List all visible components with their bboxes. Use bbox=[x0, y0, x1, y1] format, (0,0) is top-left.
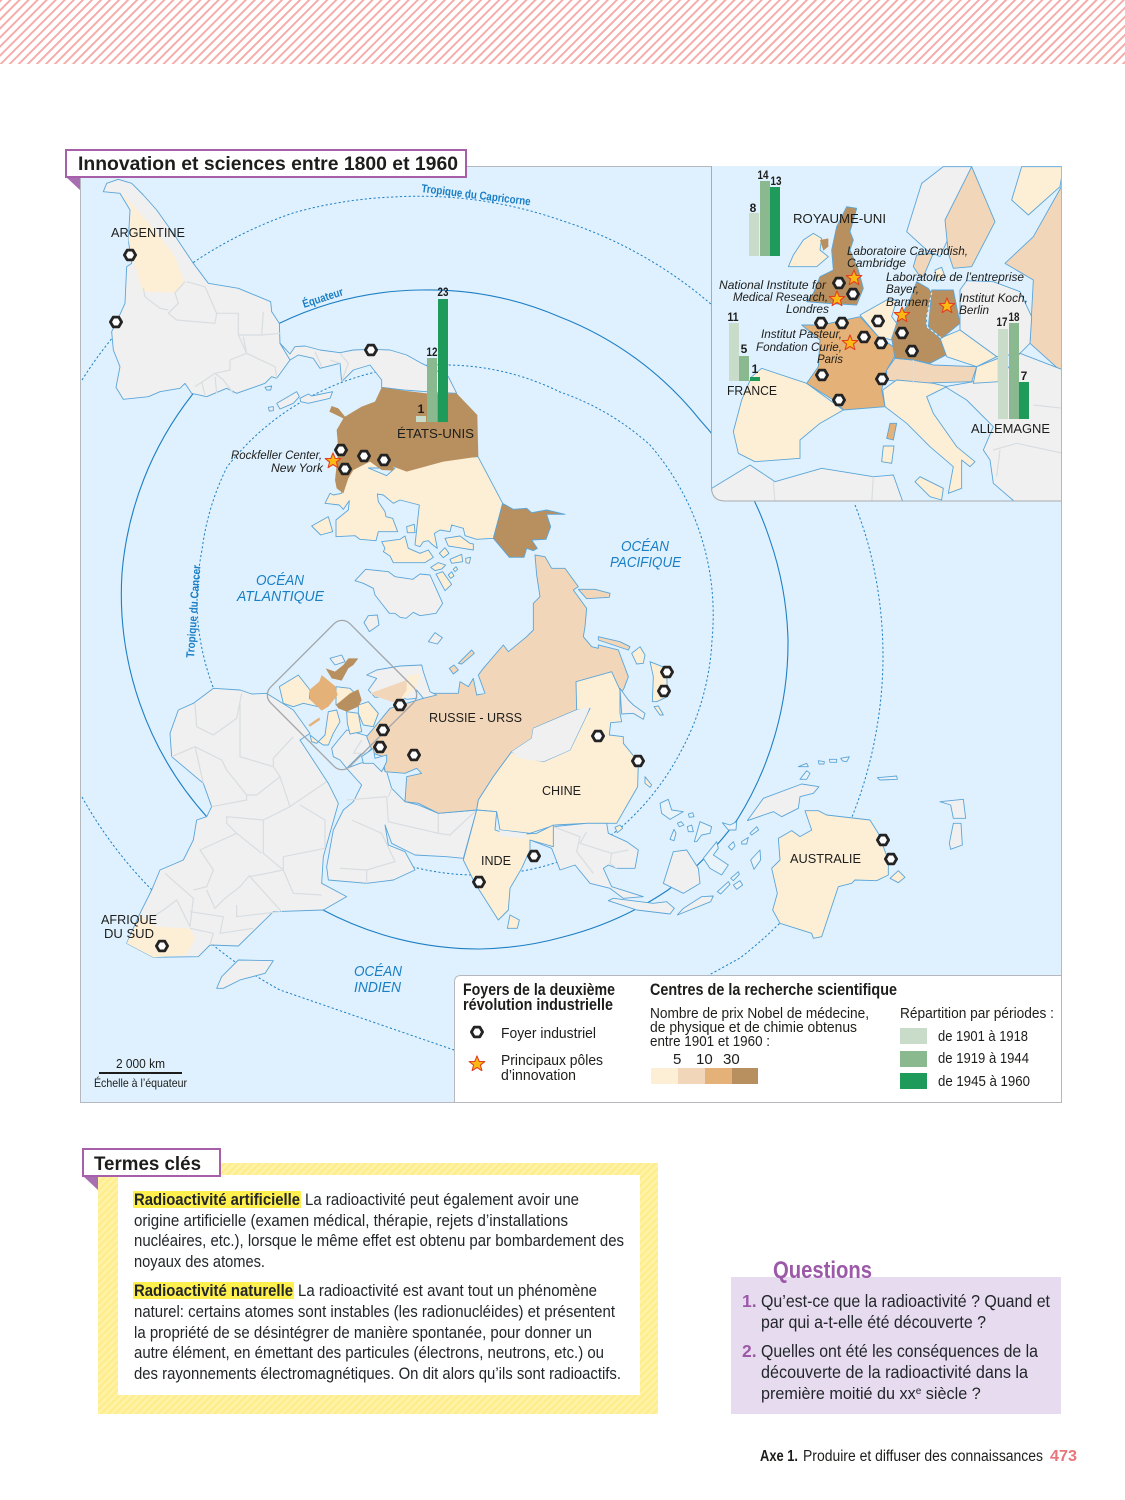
innovation pole labels: National Institute for bbox=[719, 278, 827, 292]
bar chart: Royaume-Uni: 14 bbox=[758, 168, 769, 182]
question 1: Qu’est-ce que la radioactivité ? Quand et bbox=[761, 1291, 1050, 1311]
legend: Nobel prizes scale bbox=[650, 981, 897, 1084]
country labels: RUSSIE - URSS bbox=[429, 710, 522, 725]
land: India bbox=[463, 810, 553, 920]
panel: questions: Questions bbox=[773, 1257, 872, 1284]
innovation pole labels: Laboratoire de l’entreprise bbox=[886, 270, 1024, 284]
key term: natural radioactivity: autre élément, en émettant des particules (électrons, neutrons, etc.) ou bbox=[134, 1344, 604, 1362]
bar chart: Allemagne bbox=[996, 310, 1029, 419]
question 1: par qui a-t-elle été découverte ? bbox=[761, 1312, 986, 1332]
question 2 bbox=[742, 1341, 1038, 1403]
line labels: equator and tropics: Tropique du Cancer bbox=[185, 564, 204, 658]
legend: Nobel prizes scale: 10 bbox=[696, 1051, 713, 1068]
industrial centres: inset bbox=[815, 278, 918, 405]
country labels: ALLEMAGNE bbox=[971, 421, 1050, 436]
innovation pole labels: Fondation Curie, bbox=[756, 340, 842, 354]
country labels: AFRIQUE bbox=[101, 912, 157, 927]
question 2: 2. bbox=[742, 1341, 757, 1361]
locator frame: Europe bbox=[263, 616, 421, 774]
bar chart: États-Unis: 12 bbox=[426, 345, 438, 359]
country labels: INDE bbox=[481, 853, 511, 868]
question 1 bbox=[742, 1291, 1050, 1332]
panel: questions bbox=[731, 1257, 1061, 1414]
legend: periods: de 1901 à 1918 bbox=[938, 1028, 1028, 1045]
land: Russia, China, Asia, Oceania bbox=[362, 555, 966, 938]
legend: periods: Répartition par périodes : bbox=[900, 1005, 1054, 1022]
key term: artificial radioactivity: origine artificielle (examen médical, thérapie, rejets d’installations bbox=[134, 1212, 568, 1230]
country labels: ROYAUME-UNI bbox=[793, 211, 886, 226]
line labels: equator and tropics: Tropique du Capricorne bbox=[421, 183, 531, 208]
bar chart: France bbox=[728, 310, 760, 381]
innovation pole labels: Institut Koch, bbox=[959, 291, 1028, 305]
legend: industrial foci: révolution industrielle bbox=[463, 996, 613, 1014]
question 2: e bbox=[916, 1386, 922, 1397]
country labels: ARGENTINE bbox=[111, 225, 185, 240]
land: Canada, Alaska, Greenland bbox=[312, 457, 565, 632]
map title: Innovation et sciences entre 1800 et 1960 bbox=[78, 153, 458, 175]
locator: Europe in main map bbox=[279, 655, 437, 745]
footer: page reference: Produire et diffuser des connaissances bbox=[803, 1448, 1043, 1465]
innovation pole labels: Medical Research, bbox=[733, 290, 828, 304]
innovation pole labels: Bayer, bbox=[886, 282, 919, 296]
question 2: première moitié du xx bbox=[761, 1385, 916, 1403]
ocean labels: ATLANTIQUE bbox=[236, 589, 324, 605]
key term: natural radioactivity: Radioactivité naturelle bbox=[134, 1282, 293, 1300]
scale bar: 2 000 km bbox=[116, 1056, 165, 1071]
innovation pole labels: Barmen bbox=[886, 295, 928, 309]
ocean labels: OCÉAN bbox=[621, 538, 669, 555]
legend bbox=[454, 976, 1062, 1102]
innovation pole labels bbox=[231, 244, 1028, 475]
legend: Nobel prizes scale: Centres de la recherche scientifique bbox=[650, 981, 897, 999]
country labels: CHINE bbox=[542, 783, 581, 798]
ocean labels: INDIEN bbox=[354, 980, 401, 996]
country labels: AUSTRALIE bbox=[790, 851, 861, 866]
legend: industrial foci: Foyer industriel bbox=[501, 1025, 596, 1042]
question 1: 1. bbox=[742, 1291, 757, 1311]
scale bar: Échelle à l’équateur bbox=[94, 1075, 187, 1090]
map title bbox=[66, 150, 466, 190]
key term: artificial radioactivity: nucléaires, etc.), lorsque le même effet est obtenu par bombardement des bbox=[134, 1232, 624, 1250]
legend: Nobel prizes scale: 5 bbox=[673, 1051, 681, 1068]
panel: key terms bbox=[83, 1149, 658, 1414]
country labels bbox=[101, 211, 1050, 941]
bar chart: Royaume-Uni: 8 bbox=[750, 201, 757, 215]
country labels: ÉTATS-UNIS bbox=[397, 426, 474, 441]
key term: natural radioactivity: naturel: certains atomes sont instables (les radionucléides) et présentent bbox=[134, 1303, 615, 1321]
legend: periods: de 1919 à 1944 bbox=[938, 1050, 1029, 1067]
innovation pole labels: Paris bbox=[817, 352, 843, 366]
ocean labels bbox=[236, 538, 681, 996]
industrial centres: main map bbox=[110, 250, 897, 951]
legend: Nobel prizes scale: 30 bbox=[723, 1051, 740, 1068]
innovation pole labels: New York bbox=[271, 461, 324, 475]
bar chart: États-Unis: 1 bbox=[418, 402, 425, 416]
key term: artificial radioactivity: La radioactivité peut également avoir une bbox=[305, 1191, 579, 1209]
legend: industrial foci: Foyers de la deuxième bbox=[463, 981, 615, 999]
country labels: DU SUD bbox=[104, 926, 154, 941]
key term: natural radioactivity bbox=[133, 1282, 621, 1383]
bar chart: États-Unis bbox=[416, 285, 449, 422]
innovation pole labels: Cambridge bbox=[847, 256, 906, 270]
ocean labels: PACIFIQUE bbox=[610, 555, 681, 571]
legend: industrial foci: Principaux pôles bbox=[501, 1052, 603, 1069]
legend: periods: de 1945 à 1960 bbox=[938, 1073, 1030, 1090]
scale bar bbox=[94, 1056, 187, 1090]
question 2: siècle ? bbox=[921, 1385, 981, 1403]
ocean labels: OCÉAN bbox=[256, 572, 304, 589]
bar chart: Royaume-Uni: 13 bbox=[770, 174, 782, 188]
key term: artificial radioactivity bbox=[133, 1191, 624, 1271]
key term: artificial radioactivity: noyaux des atomes. bbox=[134, 1253, 265, 1271]
map: innovation and sciences bbox=[80, 166, 1063, 1102]
innovation pole labels: Institut Pasteur, bbox=[761, 327, 842, 341]
key term: natural radioactivity: La radioactivité est avant tout un phénomène bbox=[298, 1282, 597, 1300]
land: Africa and Middle East bbox=[127, 633, 477, 988]
innovation pole labels: Londres bbox=[786, 302, 829, 316]
legend: Nobel prizes scale: Nombre de prix Nobel de médecine, bbox=[650, 1005, 869, 1022]
innovation pole labels: Rockfeller Center, bbox=[231, 448, 322, 462]
legend: Nobel prizes scale: entre 1901 et 1960 : bbox=[650, 1033, 770, 1050]
bar chart: Royaume-Uni bbox=[749, 168, 782, 256]
innovation pole labels: Laboratoire Cavendish, bbox=[847, 244, 968, 258]
land: Americas bbox=[103, 179, 457, 411]
footer: page reference: Axe 1. bbox=[760, 1448, 798, 1465]
key terms heading bbox=[83, 1149, 220, 1190]
bar chart: Allemagne: 17 bbox=[996, 315, 1008, 329]
bar chart: Allemagne: 7 bbox=[1021, 369, 1028, 383]
legend: industrial foci: d’innovation bbox=[501, 1067, 576, 1084]
line labels: equator and tropics: Équateur bbox=[301, 285, 345, 311]
legend: periods bbox=[900, 1005, 1054, 1090]
land: United States bbox=[329, 387, 478, 493]
top hatched band bbox=[0, 0, 1125, 64]
inset map: Europe bbox=[710, 166, 1063, 503]
key term: natural radioactivity: des rayonnements électromagnétiques. On dit alors qu’ils sont radioactifs. bbox=[134, 1365, 621, 1383]
line labels: equator and tropics bbox=[185, 183, 531, 658]
key terms heading: Termes clés bbox=[94, 1154, 201, 1175]
innovation pole labels: Berlin bbox=[959, 303, 989, 317]
bar chart: France: 5 bbox=[741, 342, 748, 356]
bar chart: États-Unis: 23 bbox=[438, 285, 449, 299]
legend: Nobel prizes scale: de physique et de chimie obtenus bbox=[650, 1019, 857, 1036]
reference lines: equator and tropics bbox=[82, 196, 883, 1050]
footer: page reference: 473 bbox=[1050, 1448, 1077, 1465]
bar chart: France: 11 bbox=[728, 310, 739, 324]
key term: natural radioactivity: la propriété de se désintégrer de manière spontanée, pour donner un bbox=[134, 1324, 592, 1342]
innovation poles: stars bbox=[325, 270, 955, 468]
bar chart: Allemagne: 18 bbox=[1008, 310, 1020, 324]
ocean labels: OCÉAN bbox=[354, 963, 402, 980]
country labels: FRANCE bbox=[727, 383, 777, 398]
key term: artificial radioactivity: Radioactivité artificielle bbox=[134, 1191, 300, 1209]
question 2: découverte de la radioactivité dans la bbox=[761, 1362, 1028, 1382]
question 2: Quelles ont été les conséquences de la bbox=[761, 1341, 1038, 1361]
bar chart: France: 1 bbox=[752, 362, 759, 376]
legend: industrial foci bbox=[463, 981, 615, 1084]
